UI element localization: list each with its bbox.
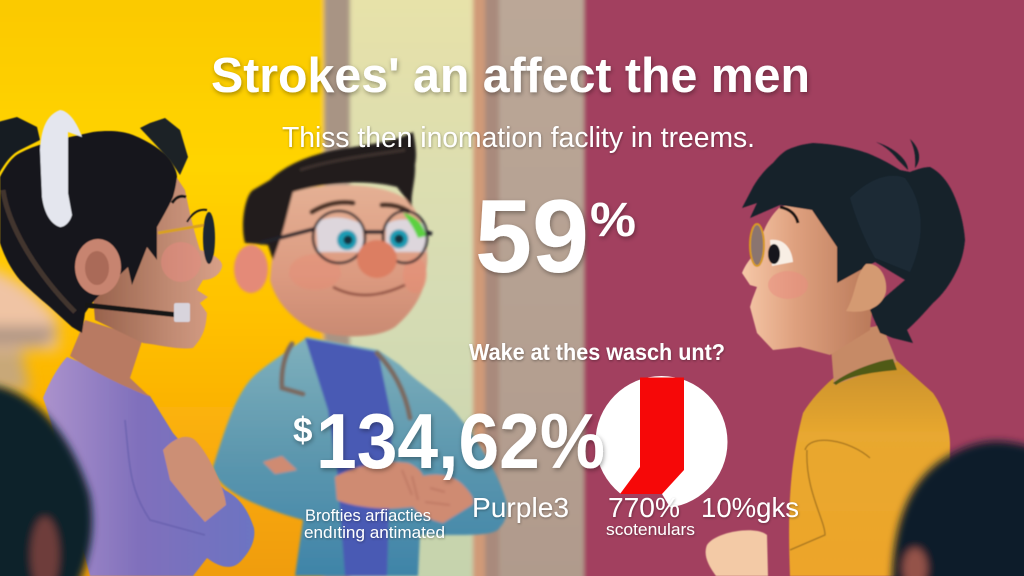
subtitle: Thiss then inomation faclity in treems. (282, 122, 755, 154)
shirt (305, 338, 392, 576)
figure: left person with headset (0, 110, 254, 576)
cheek (161, 242, 201, 282)
headset mic boom (85, 305, 188, 316)
stat: $134,62%: $ (293, 411, 312, 450)
caption: scotenulars: scotenulars (606, 520, 695, 539)
ear (846, 264, 886, 312)
eyebrow (172, 196, 186, 203)
face (90, 150, 222, 348)
hair highlights (3, 190, 75, 312)
sleeve fold (125, 420, 205, 535)
stat: 59%: 59 (475, 179, 589, 295)
finger lines (402, 470, 450, 505)
hands (335, 462, 473, 523)
ear (234, 245, 268, 293)
pie slice: red (620, 378, 684, 494)
stat: 59%: % (590, 194, 636, 247)
cheek (768, 271, 808, 299)
ear (903, 548, 927, 576)
hair tuft (876, 139, 919, 170)
far hand (263, 456, 297, 474)
hair (742, 143, 965, 343)
sleeve seam (790, 440, 870, 550)
neck (830, 325, 897, 385)
eye (770, 240, 793, 266)
ear (75, 239, 121, 295)
hair (0, 131, 177, 333)
figure: centre doctor with glasses (213, 132, 507, 576)
stethoscope (282, 344, 410, 418)
hair lock (850, 176, 921, 272)
eyebrow (780, 207, 798, 223)
face (742, 195, 875, 355)
face (270, 185, 427, 336)
glasses (403, 213, 426, 238)
question heading: Wake at thes wasch unt? (469, 339, 725, 365)
ear inner (85, 251, 109, 285)
hand (706, 530, 768, 576)
glasses lens (750, 224, 764, 266)
mic (174, 303, 190, 322)
legend value: 10%gks: 10%gks (701, 492, 799, 523)
sweater (43, 357, 254, 576)
title: Strokes' an affect the men (211, 49, 810, 103)
pie cut-out (610, 494, 674, 514)
caption: left: Brofties arfiacties (305, 506, 431, 525)
bun (0, 117, 40, 175)
legend label: Purple3: Purple3 (472, 492, 569, 523)
eyes (316, 217, 364, 252)
pie chart (596, 376, 728, 514)
headset band (40, 110, 82, 227)
cheeks (289, 254, 341, 290)
hair sheen (300, 150, 405, 170)
collar (833, 359, 897, 385)
hair tuft (140, 118, 188, 175)
hair (243, 132, 416, 260)
caption: left (304, 506, 445, 542)
nose (357, 240, 397, 278)
shirt (789, 360, 950, 576)
hand (163, 437, 226, 522)
legend value: 770%: 770% (608, 492, 680, 523)
figure: blurred foreground head, bottom left (0, 384, 92, 576)
glasses (158, 225, 205, 233)
figure: right person in yellow top (706, 139, 965, 576)
figure: blurred foreground head, bottom right (892, 441, 1024, 576)
neck (70, 320, 150, 397)
smile (333, 285, 405, 295)
eyebrows (312, 202, 408, 212)
stat: $134,62%: 134,62% (316, 397, 605, 485)
caption: left: endıting antimated (304, 523, 445, 542)
ear (31, 517, 59, 576)
jacket (213, 337, 507, 576)
background furniture, blurred peach wall (0, 265, 58, 392)
